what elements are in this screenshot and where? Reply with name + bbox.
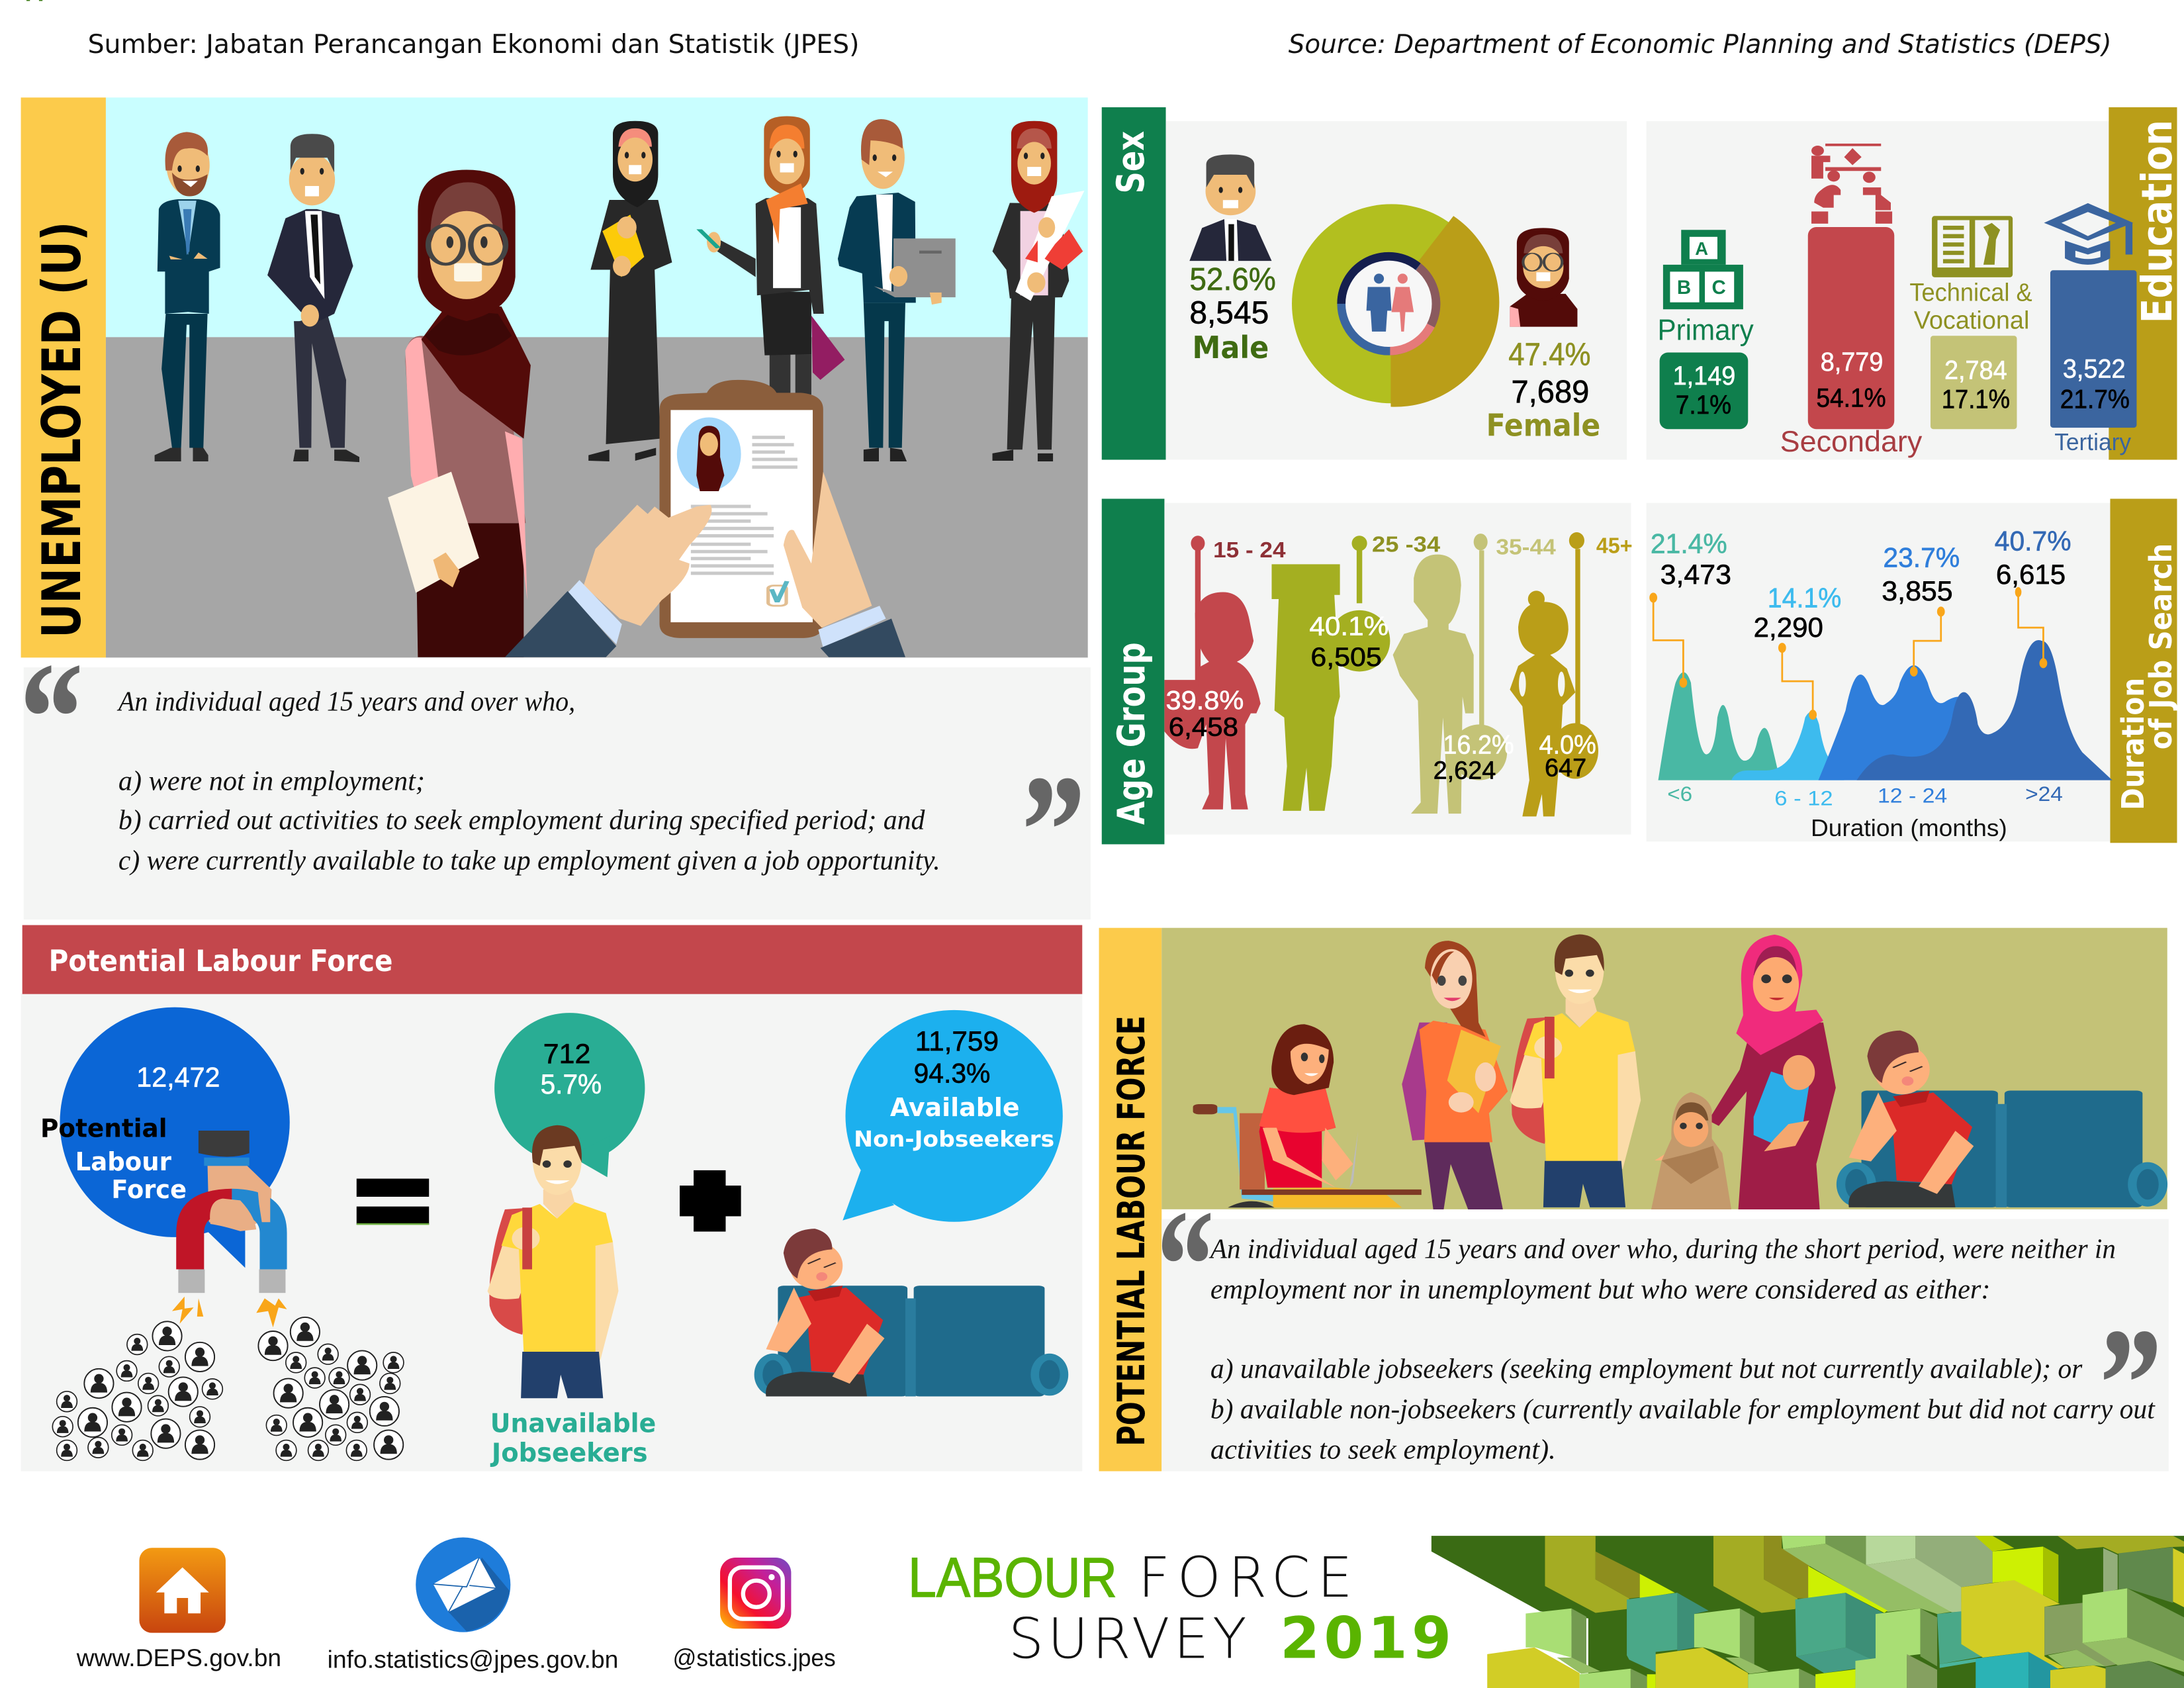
stat bar: tertiary [2050,270,2136,428]
heading: education: Education [2132,120,2181,323]
figure: age 35-44 adult [1393,534,1507,814]
definition text: b) available non-jobseekers (currently available for employment but did not carry out [1210,1394,2156,1425]
panel background [1647,121,2109,460]
heading: duration of job search: Duration [2115,678,2151,810]
stat: female [1486,336,1600,444]
panel background [1647,503,2110,841]
heading: potential labour force: POTENTIAL LABOUR FORCE [1110,1015,1154,1446]
stat: 6 to 12 months [1754,583,1841,643]
speech bubble: unavailable jobseekers: 5.7% [541,1068,602,1100]
stat bar: secondary: 54.1% [1816,384,1886,413]
panel: duration of job search [1647,498,2179,843]
quote background [24,667,1091,919]
stat: age 25-34: 40.1% [1309,612,1388,641]
panel: sex breakdown [1102,107,1627,460]
stat: 12 to 24 months: 3,855 [1882,575,1953,606]
label: technical and vocational: Technical & [1909,279,2032,307]
side bar [2109,107,2177,460]
definition text: employment nor in unemployment but who were considered as either: [1210,1274,1990,1305]
stat: age 35-44: 16.2% [1443,731,1514,760]
stat: over 24 months: 6,615 [1996,559,2066,590]
stat box: technical and vocational: 2,784 [1944,355,2007,385]
stat: male: 8,545 [1189,295,1269,330]
axis category labels: 6 - 12 [1774,786,1833,810]
stat: age 25-34: 25 -34 [1372,532,1440,557]
stat: age 15-24: 6,458 [1169,712,1238,741]
panel: unemployed banner [21,97,1088,657]
axis category labels: <6 [1667,782,1692,806]
figure: age 15-24 child [1164,536,1261,810]
figure: age 45+ older woman [1510,532,1598,816]
stat: male [1189,261,1276,365]
icon: crowd of people [52,1317,404,1460]
email address: info.statistics@jpes.gov.bn [328,1646,618,1673]
icon: alphabet blocks: C [1712,277,1726,299]
illustration: job seekers line-up [155,117,1084,657]
title: labour force survey 2019: SURVEY [1009,1607,1247,1671]
side bar [1102,498,1164,844]
person: woman in orange hijab [696,117,844,395]
person: woman in red hijab with papers [993,121,1084,461]
donut chart: share by sex [1292,204,1499,407]
stat: age 45+ [1539,534,1633,782]
stat: age 45+: 4.0% [1539,731,1596,760]
title: labour force survey 2019: 2019 [1280,1606,1451,1672]
heading: sex: Sex [1109,131,1153,194]
label: unavailable jobseekers: Unavailable [490,1409,656,1439]
title: labour force survey 2019: LABOUR [908,1546,1117,1609]
heading: unemployed: UNEMPLOYED (U) [31,222,93,638]
bubble text: total potential labour force: Force [111,1175,187,1204]
figure: age 25-34 graduate [1271,536,1390,811]
label: primary: Primary [1657,314,1754,347]
leader lines [1653,592,2043,715]
definition text: c) were currently available to take up employment given a job opportunity. [118,845,940,876]
panel: age group breakdown [1102,498,1633,844]
title: labour force survey 2019 [908,1545,1451,1672]
speech bubble: potential labour force [60,1008,290,1268]
footer: contact links [76,1537,836,1673]
stat: age 35-44 [1433,536,1556,785]
label: technical and vocational: Vocational [1914,307,2029,335]
stat: female: 7,689 [1511,374,1589,410]
stat bar: tertiary: 21.7% [2060,385,2130,414]
figure: student with backpack [1510,934,1641,1207]
bubble text: total potential labour force: 12,472 [136,1062,220,1093]
panel background [1166,121,1627,460]
icon: instagram [720,1558,791,1628]
scene background sky [106,97,1088,337]
panel background [1164,503,1631,835]
stat box: primary: 1,149 [1673,361,1735,391]
side bar [2110,498,2177,843]
person: man with songkok [267,134,359,462]
stat: age 25-34 [1309,532,1440,672]
icon: book and tools [1932,216,2013,277]
bubble text: total potential labour force: Potential [40,1113,167,1143]
definition text: b) carried out activities to seek employment during specified period; and [118,804,925,835]
stat: age 45+: 647 [1545,754,1586,782]
icon: alphabet blocks: A [1695,238,1708,259]
panel: education breakdown [1647,107,2181,460]
definition text: An individual aged 15 years and over who, [116,686,575,717]
area: 12 to 24 months [1819,665,2010,780]
panel: unemployed definition quote [13,630,1091,919]
stat: under 6 months [1651,528,1731,590]
icon: alphabet blocks: B [1677,277,1691,299]
stat: 6 to 12 months: 2,290 [1754,612,1823,643]
stat: female: 47.4% [1508,336,1590,372]
stat: age 35-44: 2,624 [1433,757,1496,785]
person: mother with baby [1708,935,1836,1209]
heading: potential labour force: Potential Labour Force [49,945,392,978]
definition text [1208,1234,2156,1466]
closing quote mark: ” [2092,1295,2159,1473]
speech bubble: available non-jobseekers: Available [890,1093,1020,1122]
axis category labels: >24 [2025,782,2063,806]
figure: student with backpack [488,1125,618,1398]
definition text: activities to seek employment). [1210,1434,1556,1466]
quote background [1161,1219,2169,1472]
icon: man and woman [1367,273,1414,332]
definition text: An individual aged 15 years and over who, during the short period, were neither in [1208,1234,2116,1265]
label: technical and vocational [1909,279,2032,335]
stat: male: 52.6% [1189,261,1276,297]
stat: over 24 months: 40.7% [1995,525,2071,556]
icon: teacher and students [1811,144,1892,224]
icon: male [1189,154,1271,261]
panel: potential labour force equation [21,925,1082,1472]
side bar [1099,928,1161,1472]
definition text: a) unavailable jobseekers (seeking employment but not currently available); or [1210,1354,2083,1385]
side bar [1102,107,1166,460]
stat: 12 to 24 months [1882,542,1960,606]
person: main woman with glasses [388,170,531,657]
speech bubble: available non-jobseekers [842,1010,1063,1222]
icon: female [1510,228,1577,327]
stat bar: secondary [1808,227,1894,429]
opening quote mark: “ [1150,1177,1212,1354]
label: secondary: Secondary [1780,426,1922,458]
figure: man dozing on sofa [1837,1031,2167,1207]
person: woman in wheelchair [1193,1024,1422,1207]
icon: graduation cap [2044,203,2133,265]
hands holding clipboard [505,472,905,657]
illustration: group of potential labour force [1193,935,1836,1209]
speech bubble: available non-jobseekers: Non-Jobseekers [854,1127,1054,1152]
stat: under 6 months: 3,473 [1661,559,1731,590]
instagram handle: @statistics.jpes [673,1644,836,1671]
icon: hand holding magnet [172,1131,287,1327]
axis category labels [1667,782,2063,810]
icon: equals sign [357,1179,429,1225]
figure: man dozing on sofa [754,1229,1068,1396]
source note: Malay: Sumber: Jabatan Perancangan Ekonomi dan Statistik (JPES) [88,30,860,60]
speech bubble: available non-jobseekers: 94.3% [914,1057,990,1088]
panel background [21,994,1082,1472]
stat bar: secondary: 8,779 [1821,348,1883,377]
icon: email envelope [416,1537,510,1632]
scene background [1161,928,2167,1209]
stat box: primary [1660,352,1748,429]
stat: age 35-44: 35-44 [1496,536,1556,560]
area: under 6 months [1659,672,1780,780]
side heading bar [21,97,106,657]
heading: duration of job search [2115,543,2179,810]
stat: female: Female [1486,408,1600,444]
stat: age 15-24 [1166,538,1286,741]
stat: male: Male [1193,330,1269,365]
stat: under 6 months: 21.4% [1651,528,1727,559]
scene background floor [106,337,1088,657]
speech bubble: unavailable jobseekers: 712 [543,1038,590,1069]
stat: 6 to 12 months: 14.1% [1768,583,1841,614]
axis category labels: 12 - 24 [1878,783,1947,807]
stat box: primary: 7.1% [1676,391,1731,420]
source note: English: Source: Department of Economic Planning and Statistics (DEPS) [1289,30,2112,60]
person: girl with folder [1402,941,1508,1209]
website address: www.DEPS.gov.bn [76,1644,281,1671]
axis title: Duration (months) [1811,815,2007,841]
area: 6 to 12 months [1731,712,1844,780]
stat: age 25-34: 6,505 [1310,643,1382,672]
area: over 24 months [1856,640,2113,780]
clipboard with CV [660,380,823,638]
label: unavailable jobseekers [490,1409,656,1468]
stat: age 15-24: 39.8% [1166,686,1244,715]
heading: age group: Age Group [1110,642,1154,825]
person: child in hijab [1651,1092,1731,1209]
stat: age 15-24: 15 - 24 [1213,538,1286,563]
opening quote mark: “ [13,630,81,807]
person: bearded man [155,132,220,461]
closing quote mark: ” [1014,742,1082,919]
bubble text: total potential labour force [40,1062,220,1204]
person: man with laptop [838,119,956,461]
stat box: technical and vocational [1931,336,2017,429]
leader dots [1649,587,2047,720]
panel: potential labour force definition quote [1150,1177,2169,1473]
label: tertiary: Tertiary [2054,429,2131,455]
area chart: duration distribution [1659,640,2113,780]
stat: age 45+: 45+ [1596,534,1633,559]
icon: alphabet blocks [1663,230,1743,309]
icon: website home [139,1548,226,1633]
speech bubble: available non-jobseekers: 11,759 [915,1025,999,1056]
icon: plus sign [680,1170,741,1232]
heading: duration of job search: of Job Search [2143,543,2179,749]
speech bubble: unavailable jobseekers [494,1013,645,1177]
stat bar: tertiary: 3,522 [2063,354,2126,383]
panel: potential labour force banner [1099,928,2167,1472]
stat: over 24 months [1995,525,2071,590]
title: labour force survey 2019: FORCE [1138,1545,1353,1610]
header bar [23,925,1082,994]
decorative graphic: isometric colour blocks [1432,1536,2184,1688]
bubble text: total potential labour force: Labour [75,1147,171,1176]
stat: 12 to 24 months: 23.7% [1883,542,1960,573]
stat box: technical and vocational: 17.1% [1942,385,2010,414]
person: woman in black hijab [588,121,672,461]
definition text [116,686,940,876]
label: unavailable jobseekers: Jobseekers [490,1438,648,1468]
definition text: a) were not in employment; [118,765,425,796]
